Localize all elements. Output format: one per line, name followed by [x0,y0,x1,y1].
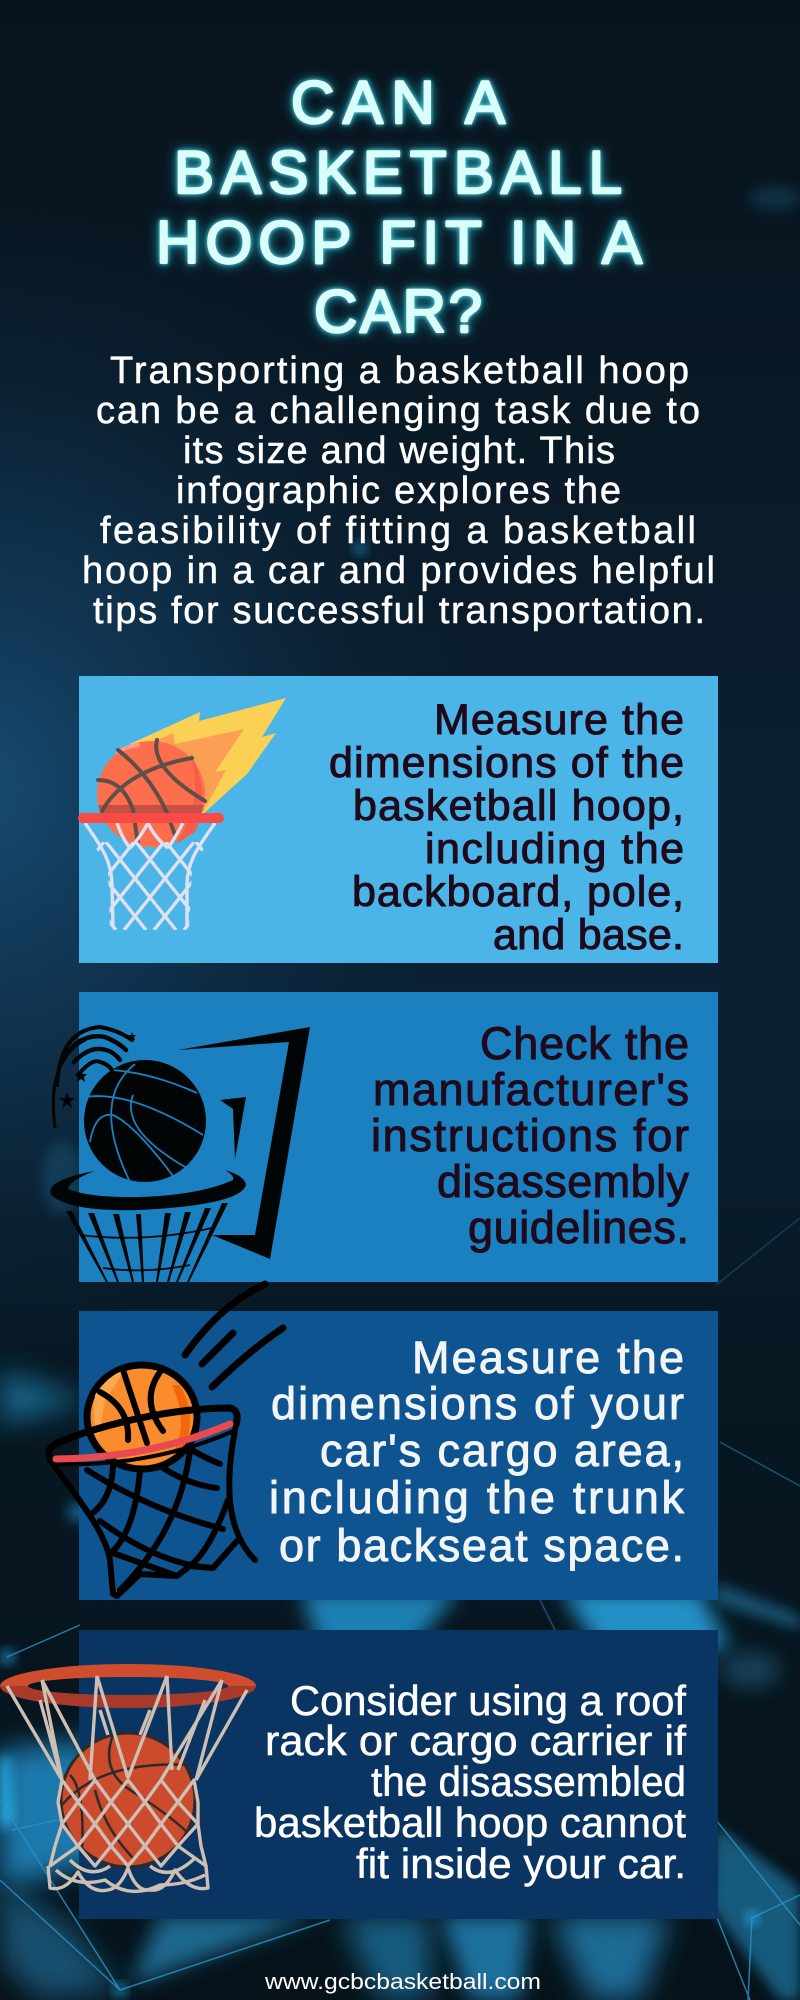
panel 4 text [254,1677,686,1887]
panel 3 text: dimensions of your [271,1378,684,1429]
panel 4 text: basketball hoop cannot [254,1799,686,1846]
intro text block: infographic explores the [176,470,621,512]
panel 2: check instructions [50,992,718,1282]
title: CAN A [291,69,505,136]
panel 3: measure the car [49,1284,718,1600]
icon: basketball in white net [0,1664,256,1891]
title: HOOP FIT IN A [156,209,642,276]
intro text block: tips for successful transportation. [93,590,705,632]
panel 4 text: fit inside your car. [356,1840,686,1887]
panel 1 text: Measure the [434,696,684,744]
panel 1 text: dimensions of the [329,739,684,787]
panel 3 text [269,1332,684,1571]
intro text block: can be a challenging task due to [96,390,700,432]
intro text block: Transporting a basketball hoop [110,350,689,392]
panel 1 text: backboard, pole, [352,868,684,916]
title [156,69,642,345]
panel 2 text [371,1018,690,1253]
panel 1: measure the hoop [34,676,718,963]
panel 3 text: Measure the [412,1332,684,1383]
panel 2 text: guidelines. [468,1202,689,1253]
panel 2 text: manufacturer's [373,1064,689,1115]
title: CAR? [314,278,482,345]
panel 2 text: instructions for [371,1110,689,1161]
panel 1 text: including the [425,825,684,873]
icon: black basketball and backboard [50,1027,310,1282]
panel 3 text: or backseat space. [279,1520,684,1571]
panel 1 text [329,696,684,959]
intro text block: feasibility of fitting a basketball [100,510,696,552]
panel 1 text: and base. [493,911,684,959]
panel 2 text: disassembly [437,1156,690,1207]
panel 4 text: Consider using a roof [290,1677,686,1724]
panel 4 text: rack or cargo carrier if [265,1717,686,1764]
icon: orange basketball dropping through net [49,1284,283,1596]
panel 3 text: including the trunk [269,1472,684,1523]
intro text block: hoop in a car and provides helpful [82,550,715,592]
title: BASKETBALL [174,139,622,206]
panel 2 text: Check the [480,1018,689,1069]
panel 3 text: car's cargo area, [320,1425,684,1476]
intro text block [82,350,715,632]
panel 1 text: basketball hoop, [353,782,684,830]
panel 4 text: the disassembled [371,1758,686,1805]
icon: flaming basketball in hoop [78,698,286,930]
intro text block: its size and weight. This [183,430,615,472]
panel 4: roof rack [0,1630,718,1919]
footer: website: www.gcbcbasketball.com [264,1969,541,1994]
